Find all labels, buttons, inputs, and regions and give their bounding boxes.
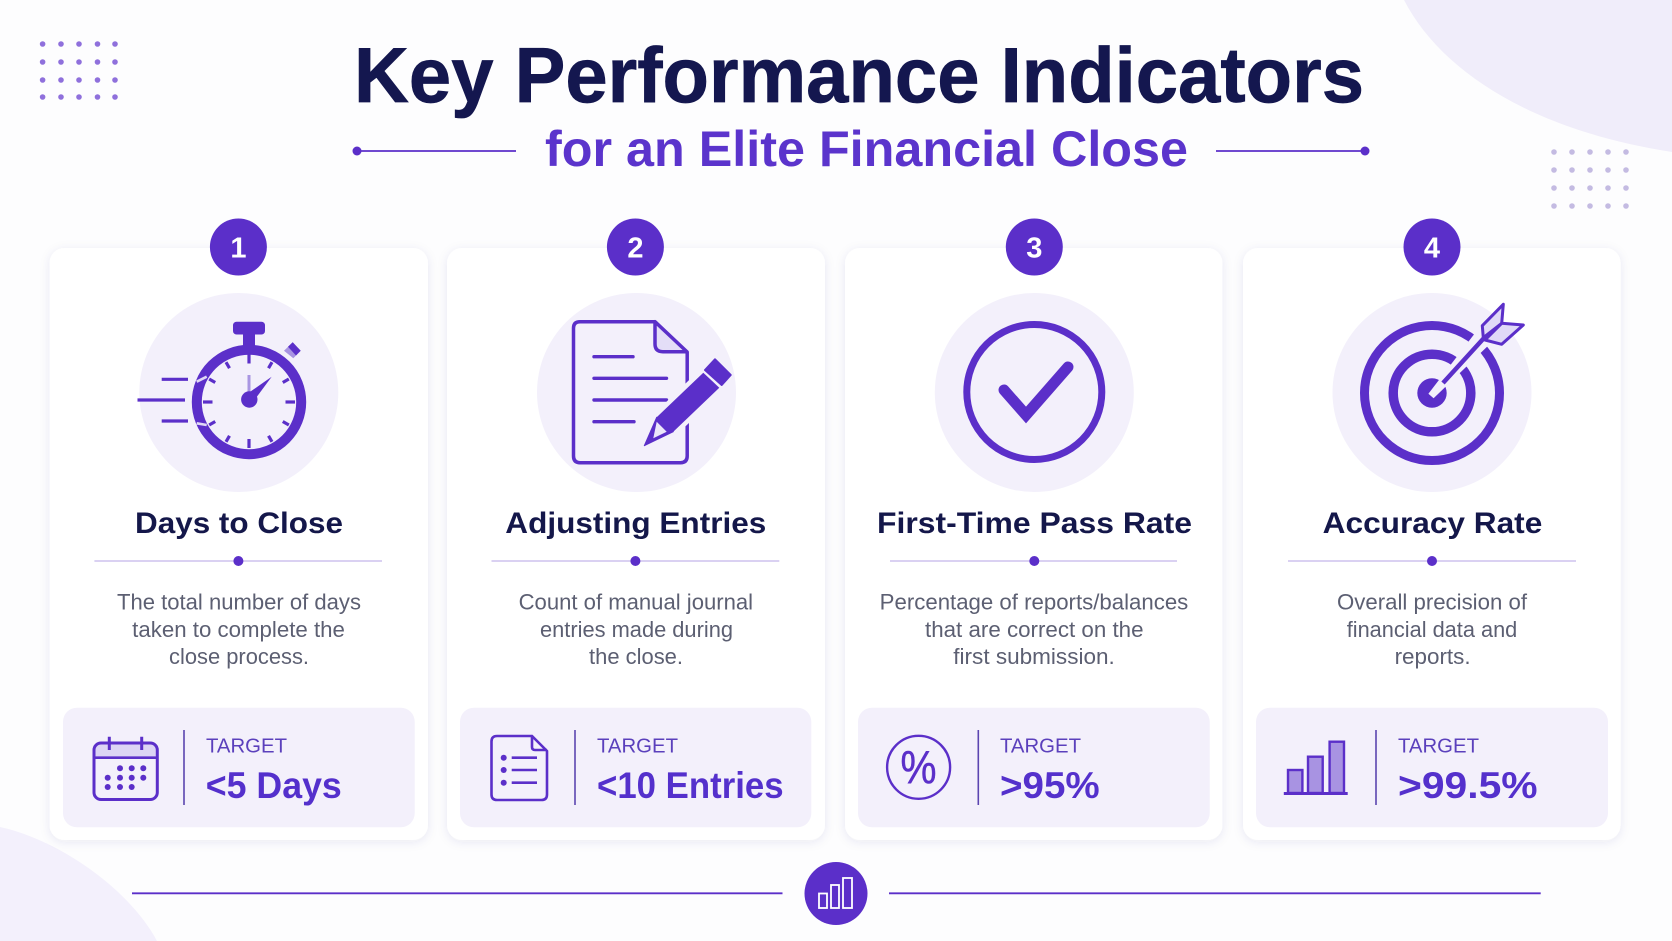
number badge 1 xyxy=(210,218,267,276)
panel: days to close xyxy=(50,218,428,840)
target box xyxy=(460,708,811,827)
description: close process. xyxy=(169,644,309,669)
icon: calendar xyxy=(94,737,157,800)
target box xyxy=(1256,708,1608,827)
footer rule right xyxy=(889,892,1541,894)
divider xyxy=(890,556,1177,566)
panel: adjusting entries xyxy=(447,218,825,840)
target label: TARGET xyxy=(597,734,678,758)
number badge 3: 3 xyxy=(1026,232,1042,264)
target value: >95% xyxy=(1000,765,1100,806)
icon: check circle xyxy=(935,293,1134,492)
icon: target with arrow xyxy=(1332,293,1532,492)
title: Key Performance Indicators xyxy=(354,31,1364,119)
number badge 4 xyxy=(1404,218,1460,276)
heading: Adjusting Entries xyxy=(505,507,766,540)
number badge 1: 1 xyxy=(230,232,246,264)
target box xyxy=(63,708,415,827)
divider xyxy=(94,556,382,566)
description xyxy=(519,590,753,669)
heading: Days to Close xyxy=(135,507,343,540)
description: Percentage of reports/balances xyxy=(880,590,1188,614)
target box xyxy=(858,708,1210,827)
icon: list document xyxy=(492,736,547,800)
description: the close. xyxy=(589,644,683,669)
panel: accuracy rate xyxy=(1243,218,1621,840)
description: that are correct on the xyxy=(925,617,1144,642)
description: taken to complete the xyxy=(132,617,345,642)
divider xyxy=(492,556,779,566)
description xyxy=(1337,590,1528,669)
description: reports. xyxy=(1395,644,1471,669)
description xyxy=(117,590,361,669)
target label: TARGET xyxy=(1398,734,1479,758)
target label: TARGET xyxy=(1000,734,1081,758)
icon: percent circle xyxy=(887,736,950,799)
description: Overall precision of xyxy=(1337,590,1528,614)
target value: >99.5% xyxy=(1398,765,1538,806)
icon: percent circle: % xyxy=(900,741,936,793)
number badge 2 xyxy=(607,218,664,276)
target label: TARGET xyxy=(206,734,287,758)
subtitle left rule xyxy=(352,146,516,156)
icon: bar chart xyxy=(1284,742,1348,794)
description: The total number of days xyxy=(117,590,361,614)
description xyxy=(880,590,1188,669)
number badge 4: 4 xyxy=(1424,232,1440,264)
icon: footer bar chart badge xyxy=(804,862,868,925)
number badge 3 xyxy=(1006,218,1063,276)
target value: <5 Days xyxy=(206,765,342,806)
subtitle right rule xyxy=(1216,146,1370,156)
footer rule left xyxy=(132,892,782,894)
icon: stopwatch xyxy=(138,293,338,492)
description: Count of manual journal xyxy=(519,590,753,614)
number badge 2: 2 xyxy=(627,232,643,264)
description: financial data and xyxy=(1347,617,1517,642)
subtitle: for an Elite Financial Close xyxy=(545,121,1188,177)
heading: First-Time Pass Rate xyxy=(877,507,1192,540)
divider xyxy=(1288,556,1576,566)
description: entries made during xyxy=(540,617,733,642)
panel: first-time pass rate xyxy=(845,218,1222,840)
icon: document and pencil xyxy=(537,293,736,492)
description: first submission. xyxy=(953,644,1115,669)
heading: Accuracy Rate xyxy=(1323,507,1542,540)
target value: <10 Entries xyxy=(597,765,784,806)
